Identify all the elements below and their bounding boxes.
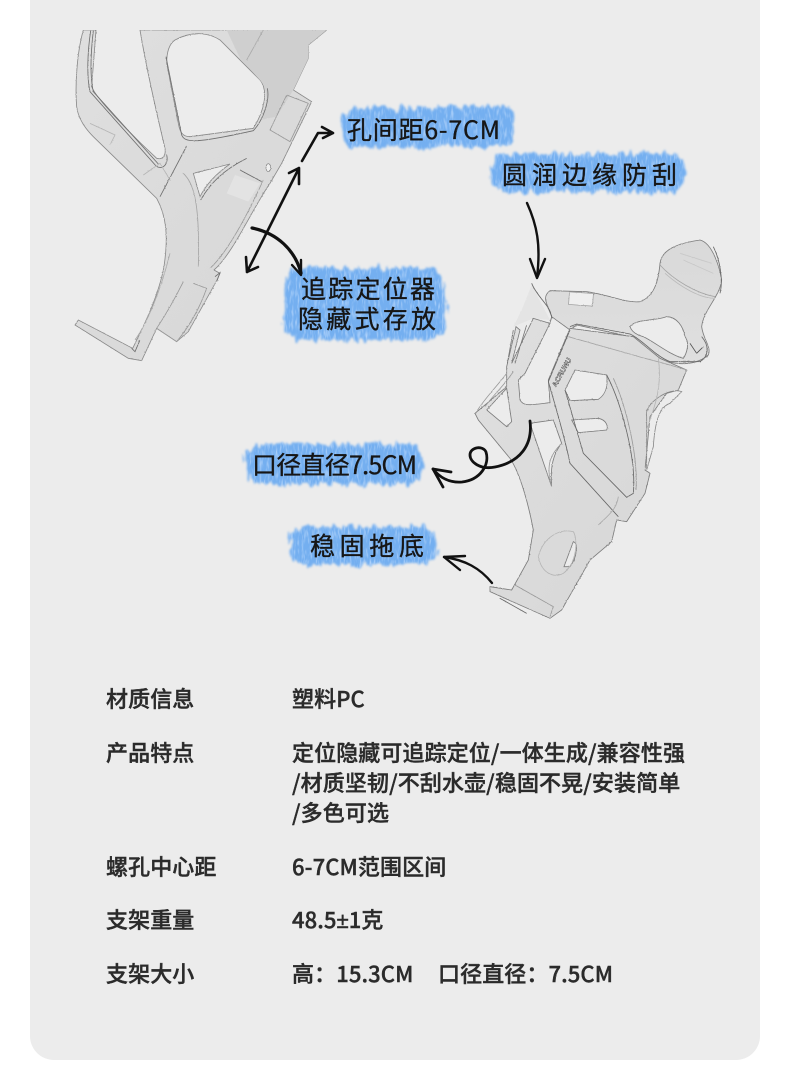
callout: hidden tracker storage: 隐藏式存放 — [298, 300, 436, 336]
spec value: material: 塑料PC — [292, 682, 365, 714]
spec value: weight: 48.5±1克 — [292, 903, 384, 935]
arrow: to rounded edge point — [527, 203, 545, 278]
spec value: size: 口径直径：7.5CM — [438, 957, 613, 989]
spec label: size: 支架大小 — [106, 957, 194, 989]
spec value: features: 定位隐藏可追踪定位/一体生成/兼容性强 — [292, 736, 685, 768]
spec value: size — [292, 957, 613, 989]
bottle cage sketch: front view — [475, 240, 722, 618]
small label tab — [569, 292, 593, 306]
arrow: squiggle to mouth diameter — [433, 421, 530, 487]
arrow: to tracker label — [252, 228, 301, 275]
spec value: features: /材质坚韧/不刮水壶/稳固不晃/安装简单 — [292, 766, 680, 798]
spec label: hole spacing: 螺孔中心距 — [106, 850, 217, 882]
spec value: hole spacing: 6-7CM范围区间 — [292, 850, 446, 882]
spec label: material: 材质信息 — [106, 682, 194, 714]
callout: hidden tracker storage — [283, 268, 445, 340]
spec value: features: /多色可选 — [292, 796, 389, 828]
translucent rim shade — [513, 285, 550, 327]
arrow: hole spacing double arrow — [246, 127, 333, 272]
spec table — [106, 682, 685, 989]
bottle cage sketch: side view — [75, 30, 327, 361]
spec value: features — [292, 736, 685, 828]
spec label: features: 产品特点 — [106, 736, 194, 768]
upper wing — [546, 240, 722, 364]
spec value: size: 高：15.3CM — [292, 957, 413, 989]
callout: rounded edge: 圆润边缘防刮 — [502, 156, 677, 192]
brand mark: ACRUNU — [552, 357, 573, 388]
callout: stable base: 稳固拖底 — [310, 527, 424, 563]
callout: hidden tracker storage: 追踪定位器 — [301, 270, 435, 306]
callout: hole spacing: 孔间距6-7CM — [347, 111, 500, 147]
main body — [475, 318, 687, 618]
callout: mouth diameter: 口径直径7.5CM — [252, 446, 417, 482]
arrow: to stable base — [444, 556, 492, 583]
spec label: weight: 支架重量 — [106, 903, 194, 935]
